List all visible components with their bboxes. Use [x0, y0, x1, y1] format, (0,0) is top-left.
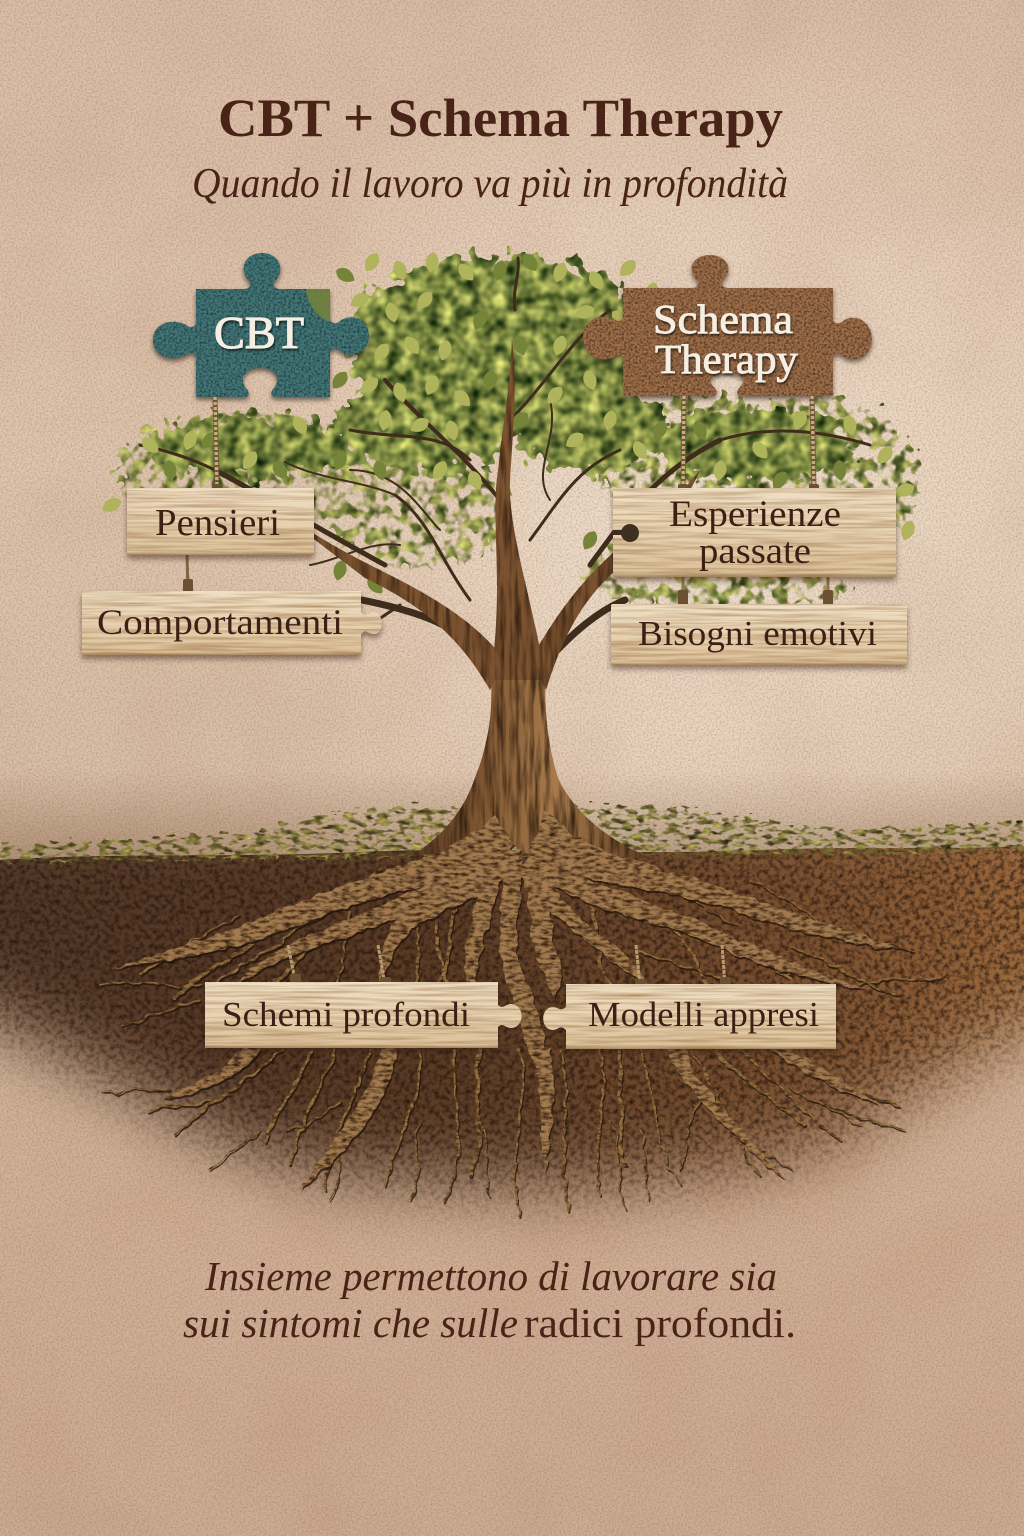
puzzle piece: Schema Therapy: Therapy: [655, 336, 799, 382]
closing statement: sui sintomi che sulle: [183, 1300, 518, 1346]
puzzle piece: Schema Therapy: [583, 255, 872, 396]
puzzle piece: Schema Therapy: Schema: [653, 296, 793, 342]
wooden sign: Schemi profondi: Schemi profondi: [222, 995, 470, 1034]
wooden sign: Schemi profondi: [205, 982, 522, 1048]
wooden sign: Modelli appresi: Modelli appresi: [588, 995, 819, 1034]
soil cross-section: [0, 800, 1024, 1182]
roots: main tapered roots: [112, 810, 915, 1190]
wooden sign: Comportamenti: Comportamenti: [97, 602, 343, 642]
wooden sign: Esperienze passate: passate: [699, 531, 811, 572]
wooden sign: Bisogni emotivi: [611, 604, 907, 665]
wooden sign: Pensieri: [127, 488, 314, 555]
subtitle: Quando il lavoro va più in profondità: [192, 161, 788, 207]
rope: Pensieri to Comportamenti: [183, 555, 193, 599]
tree canopy: bright foreground leaves: [99, 250, 917, 543]
closing statement: [183, 1253, 796, 1346]
wooden sign: Comportamenti: [82, 591, 382, 655]
wooden sign: Modelli appresi: [543, 984, 836, 1049]
closing statement: radici profondi.: [524, 1300, 796, 1346]
rope: CBT to Pensieri: [212, 397, 222, 498]
wooden sign: Esperienze passate: Esperienze: [669, 494, 841, 535]
tree branches: [140, 258, 870, 665]
tree trunk: [412, 663, 650, 858]
closing statement: Insieme permettono di lavorare sia: [204, 1253, 777, 1299]
tree canopy: leaf masses: [115, 255, 920, 612]
puzzle piece: CBT: CBT: [214, 307, 304, 358]
wooden sign: Esperienze passate: [613, 488, 896, 577]
ropes: Esperienze passate to Bisogni emotivi: [678, 577, 833, 613]
roots: fine rootlets: [100, 870, 945, 1215]
wooden sign: Pensieri: Pensieri: [155, 502, 280, 544]
main limbs: [250, 340, 700, 690]
ropes: Schema Therapy to Esperienze passate: [678, 396, 819, 496]
ropes: root labels: [288, 945, 731, 998]
tree canopy: mid-green leaves: [162, 250, 847, 598]
grass along the horizon: [0, 807, 1024, 866]
puzzle piece: CBT: [153, 253, 369, 397]
wooden sign: Bisogni emotivi: Bisogni emotivi: [638, 614, 877, 653]
title: CBT + Schema Therapy: [218, 88, 783, 148]
